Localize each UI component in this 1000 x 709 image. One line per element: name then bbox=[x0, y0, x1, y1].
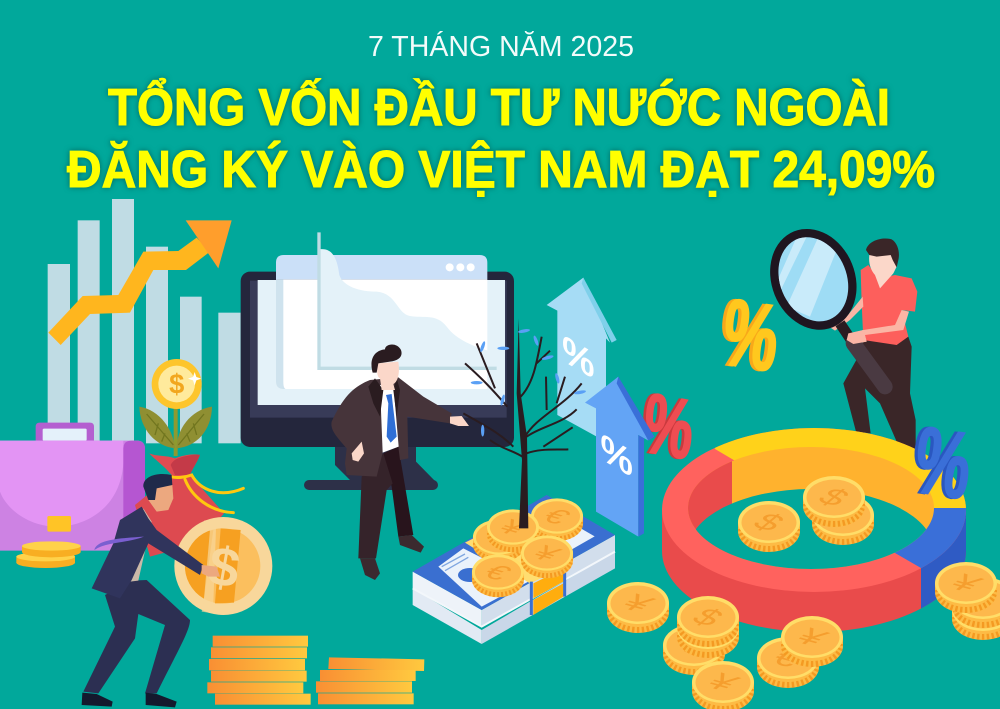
top face segments bbox=[662, 428, 966, 592]
young bare tree bbox=[463, 318, 586, 528]
yellow percent sign: % bbox=[716, 279, 785, 391]
scattered gold coins: ¥ bbox=[613, 589, 662, 617]
red money bag bbox=[135, 453, 243, 557]
red percent sign: % bbox=[636, 376, 696, 478]
bar chart with rising arrow bbox=[48, 199, 241, 443]
man pushing large coin bbox=[82, 474, 272, 707]
money plant in red bag bbox=[135, 359, 243, 557]
title line 2: ĐĂNG KÝ VÀO VIỆT NAM ĐẠT 24,09% bbox=[67, 140, 935, 199]
dollar coin flower: $ bbox=[169, 368, 184, 399]
scattered gold coins: ¥ bbox=[787, 623, 836, 651]
large dollar coin bbox=[174, 517, 272, 615]
blue percent sign: % bbox=[908, 407, 978, 519]
scattered gold coins: ¥ bbox=[941, 569, 990, 597]
red percent sign: % bbox=[639, 376, 699, 478]
title bbox=[67, 78, 935, 199]
stacks of gold bars bbox=[207, 636, 424, 705]
businessman in suit pointing bbox=[331, 345, 469, 580]
scattered gold coins: ¥ bbox=[669, 631, 718, 659]
magnifying glass bbox=[755, 216, 885, 387]
coins inside donut: $ bbox=[810, 483, 857, 511]
blue up arrow with percent: % bbox=[600, 425, 633, 486]
gold coins on banknotes: ¥ bbox=[525, 541, 567, 566]
pushing man figure bbox=[82, 474, 220, 707]
blue percent sign: % bbox=[905, 407, 974, 519]
scattered gold coins bbox=[607, 562, 1000, 709]
rising arrow bbox=[48, 220, 232, 345]
light blue up arrow with percent bbox=[547, 278, 617, 437]
man with magnifying glass bbox=[755, 216, 917, 450]
monitor stand bbox=[304, 443, 438, 490]
computer monitor bbox=[241, 232, 514, 490]
monitor body bbox=[241, 272, 514, 447]
stack of banknotes bbox=[413, 495, 615, 644]
red t-shirt bbox=[861, 265, 917, 345]
coins inside donut: $ bbox=[745, 508, 792, 536]
scattered gold coins: $ bbox=[684, 603, 731, 631]
gold coins on banknotes: € bbox=[536, 504, 577, 529]
chart window bbox=[276, 232, 497, 389]
scattered gold coins: ¥ bbox=[698, 668, 747, 696]
dollar coin flower bbox=[152, 359, 202, 409]
blue up arrow with percent bbox=[585, 377, 654, 537]
3D donut chart bbox=[662, 428, 966, 632]
chart bars bbox=[48, 199, 241, 443]
large dollar coin: $ bbox=[203, 534, 244, 600]
coins inside donut: $ bbox=[819, 501, 866, 529]
outer wall bbox=[662, 510, 966, 632]
small gold coins beside briefcase bbox=[16, 541, 81, 568]
coins inside donut bbox=[738, 476, 874, 552]
arms bbox=[830, 297, 909, 344]
title line 1: TỔNG VỐN ĐẦU TƯ NƯỚC NGOÀI bbox=[108, 78, 890, 137]
plant stem and leaves bbox=[139, 407, 212, 456]
yellow percent sign: % bbox=[713, 279, 782, 391]
light blue up arrow with percent: % bbox=[562, 326, 595, 388]
gold coins on banknotes: ¥ bbox=[491, 515, 533, 540]
trousers bbox=[843, 337, 916, 450]
purple briefcase bbox=[0, 423, 145, 551]
head bbox=[866, 238, 899, 288]
gold coins on banknotes: € bbox=[477, 560, 518, 585]
subtitle: 7 THÁNG NĂM 2025 bbox=[368, 31, 634, 63]
gold coins on banknotes bbox=[472, 498, 583, 597]
scattered gold coins: € bbox=[764, 644, 811, 672]
inner wall and hole bbox=[688, 447, 934, 569]
